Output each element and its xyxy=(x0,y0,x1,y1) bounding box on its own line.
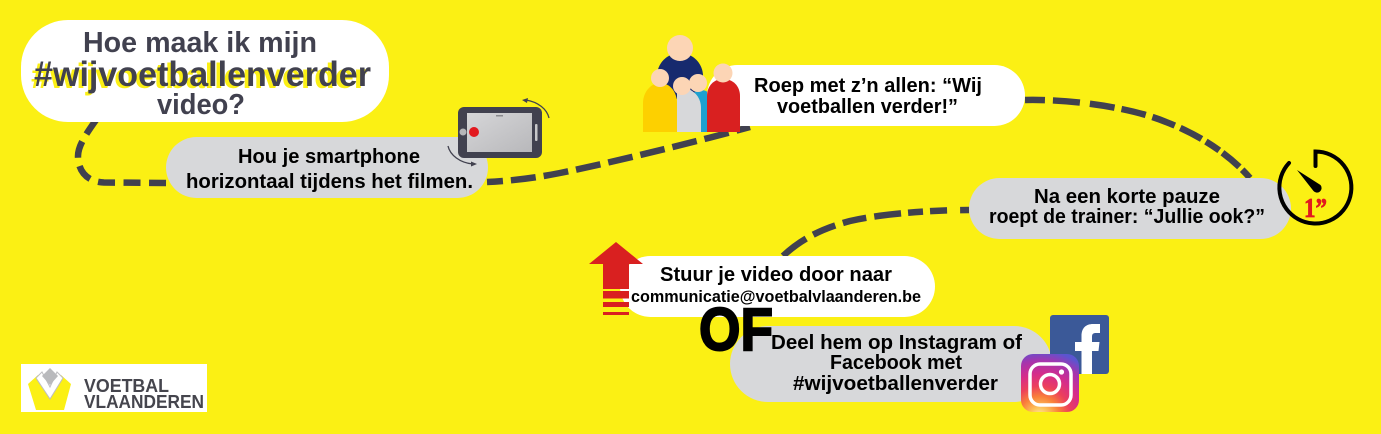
step text: Stuur je video door naar xyxy=(660,264,892,286)
step text: Roep met z’n allen: “Wij xyxy=(754,75,982,97)
icon: rotating phone xyxy=(448,98,549,166)
panel: send by mail xyxy=(620,256,935,317)
panel: share on social xyxy=(730,326,1052,402)
hashtag heading: #wijvoetballenverder xyxy=(31,57,367,96)
step text xyxy=(754,75,982,118)
hashtag heading: #wijvoetballenverder xyxy=(34,55,371,94)
step text: Deel hem op Instagram of xyxy=(771,332,1022,354)
icon: facebook xyxy=(1050,315,1109,374)
step text: Na een korte pauze xyxy=(1034,186,1220,208)
icon: stopwatch one second xyxy=(1279,152,1351,223)
step text: #wijvoetballenverder xyxy=(793,373,998,395)
email address: communicatie@voetbalvlaanderen.be xyxy=(631,287,921,306)
step text: Facebook met xyxy=(830,352,962,374)
heading line 1: Hoe maak ik mijn xyxy=(83,27,317,59)
step text xyxy=(186,146,473,193)
logo wordmark: VOETBAL xyxy=(84,376,169,396)
step text: roept de trainer: “Jullie ook?” xyxy=(989,206,1265,228)
icon: group of people xyxy=(643,35,740,132)
step text: voetballen verder!” xyxy=(777,96,958,118)
step text xyxy=(771,332,1022,395)
logo wordmark: VLAANDEREN xyxy=(84,392,204,412)
icon: stopwatch one second: 1” xyxy=(1304,193,1327,223)
dashed route xyxy=(78,100,1250,256)
step text xyxy=(989,186,1265,228)
heading: OF: OF xyxy=(699,296,773,363)
logo wordmark xyxy=(84,376,204,412)
heading line 3: video? xyxy=(157,89,245,121)
panel: trainer xyxy=(969,178,1291,239)
panel: title xyxy=(21,20,389,122)
panel: step horizontal xyxy=(166,137,488,198)
logo mark xyxy=(28,368,71,410)
step text: Hou je smartphone xyxy=(238,146,420,168)
panel: shout together xyxy=(707,65,1025,126)
icon: upload arrow xyxy=(589,242,643,315)
logo: Voetbal Vlaanderen xyxy=(21,364,207,412)
step text: horizontaal tijdens het filmen. xyxy=(186,171,473,193)
icon: instagram xyxy=(1021,354,1079,412)
